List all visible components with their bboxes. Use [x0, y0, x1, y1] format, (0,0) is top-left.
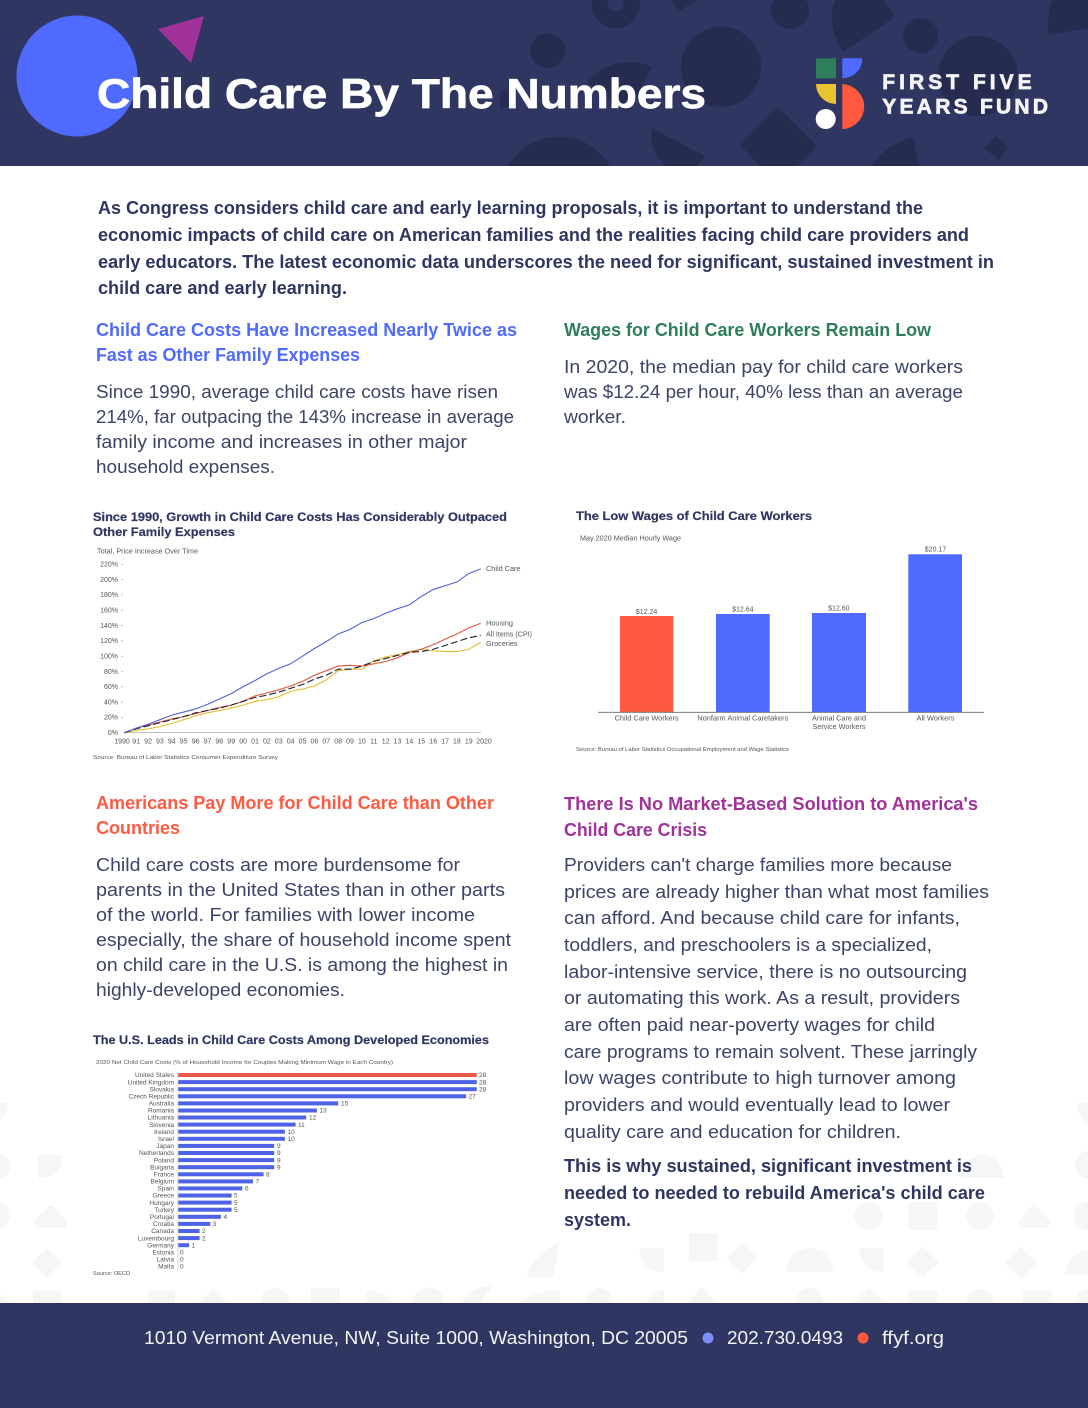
- horizontal bar chart: developed economies: 0: [180, 1250, 184, 1256]
- text: market: care programs to remain solvent. These jarringly: [564, 1041, 978, 1062]
- text: market: are often paid near-poverty wages for child: [564, 1014, 935, 1035]
- line chart: growth in costs: 92: [144, 738, 152, 746]
- heading: market: There Is No Market-Based Solution to America's: [564, 794, 978, 814]
- intro paragraph: child care and early learning.: [98, 278, 347, 298]
- line chart: growth in costs: 200%: [100, 577, 118, 584]
- horizontal bar chart: developed economies: Netherlands: [139, 1150, 175, 1157]
- line chart: growth in costs: 100%: [100, 654, 118, 660]
- text: market: quality care and education for children.: [564, 1121, 901, 1142]
- line chart: growth in costs: 160%: [100, 608, 118, 614]
- heading: international: [96, 793, 494, 838]
- horizontal bar chart: developed economies: Hungary: [149, 1200, 175, 1207]
- line chart: growth in costs: 0%: [108, 730, 118, 737]
- text: costs: 214%, far outpacing the 143% increase in average: [96, 406, 514, 427]
- bar chart: low wages: Service Workers: [812, 724, 866, 731]
- line chart: growth in costs: 94: [168, 738, 176, 746]
- horizontal bar chart: developed economies: 9: [277, 1143, 281, 1150]
- bar chart: low wages: Source: Bureau of Labor Statistics Occupational Employment and Wage Statistics: [576, 747, 789, 753]
- horizontal bar chart: developed economies: United States: [135, 1072, 175, 1079]
- horizontal bar chart: developed economies: 7: [256, 1179, 260, 1186]
- horizontal bar chart: developed economies: 0: [180, 1264, 184, 1271]
- horizontal bar chart: developed economies: Australia: [149, 1101, 174, 1108]
- bar chart: low wages: Animal Care and: [812, 716, 866, 723]
- logo: First Five Years Fund: YEARS FUND: [882, 95, 1048, 118]
- line chart: growth in costs: 95: [180, 738, 188, 746]
- bar chart: low wages: $12.60: [828, 606, 850, 612]
- horizontal bar chart: developed economies: Portugal: [150, 1214, 175, 1221]
- footer red dot: [858, 1332, 868, 1344]
- line chart: growth in costs: 02: [263, 738, 271, 746]
- text: market: Providers can't charge families more because: [564, 854, 952, 875]
- horizontal bar chart: developed economies: Bulgaria: [150, 1164, 174, 1171]
- line chart: growth in costs: Since 1990, Growth in Child Care Costs Has Considerably Outpaced: [93, 510, 507, 524]
- heading: international: Americans Pay More for Child Care than Other: [96, 793, 494, 813]
- line chart: growth in costs: 07: [322, 738, 330, 746]
- decorative blue circle: [16, 16, 138, 136]
- horizontal bar chart: developed economies: 27: [468, 1094, 476, 1100]
- horizontal bar chart: developed economies: Greece: [153, 1193, 174, 1200]
- text: international: especially, the share of household income spent: [96, 929, 511, 950]
- horizontal bar chart: developed economies: Malta: [158, 1264, 174, 1271]
- text: wages: worker.: [563, 406, 626, 427]
- horizontal bar chart: developed economies: 13: [320, 1108, 327, 1115]
- panel: child care costs: [96, 320, 517, 477]
- line chart: growth in costs: 11: [370, 738, 378, 746]
- horizontal bar chart: developed economies: United Kingdom: [128, 1079, 174, 1086]
- panel: international comparison: [96, 793, 511, 1000]
- intro paragraph: [98, 198, 994, 298]
- heading: wages: Wages for Child Care Workers Remain Low: [564, 320, 932, 340]
- horizontal bar chart: developed economies: 11: [298, 1122, 305, 1129]
- horizontal bar chart: developed economies: 9: [277, 1164, 281, 1171]
- line chart: growth in costs: 140%: [100, 623, 118, 630]
- header band: [0, 0, 1088, 166]
- bar chart: low wages: $12.64: [732, 607, 754, 614]
- callout: sustained investment: This is why sustained, significant investment is: [564, 1156, 972, 1176]
- line chart: growth in costs: All Items (CPI): [486, 631, 532, 638]
- logo: First Five Years Fund: [816, 58, 1048, 129]
- line chart: growth in costs: 80%: [104, 669, 118, 676]
- text: international: parents in the United States than in other parts: [96, 879, 505, 900]
- text: wages: [563, 356, 963, 427]
- text: market: can afford. And because child care for infants,: [564, 907, 960, 928]
- decorative purple triangle: [158, 16, 204, 63]
- horizontal bar chart: developed economies: 2: [202, 1235, 206, 1242]
- text: international: highly-developed economies.: [96, 979, 345, 1000]
- heading: costs: [96, 320, 517, 365]
- intro paragraph: economic impacts of child care on American families and the realities facing child care providers and: [98, 225, 969, 245]
- line chart: growth in costs: 19: [465, 738, 473, 746]
- line chart: growth in costs: 01: [251, 738, 259, 746]
- horizontal bar chart: developed economies: 2020 Net Child Care Costs (% of Household Income for Couples Making Minimum Wage in Each Country): [96, 1060, 393, 1066]
- line chart: growth in costs: 18: [453, 738, 461, 746]
- bar chart: low wages: $20.17: [925, 547, 946, 554]
- horizontal bar chart: developed economies: Germany: [147, 1242, 175, 1249]
- text: market: providers and would eventually lead to lower: [564, 1094, 950, 1115]
- text: international: [96, 854, 511, 1000]
- logo: First Five Years Fund: FIRST FIVE: [882, 71, 1032, 94]
- line chart: growth in costs: Housing: [486, 620, 513, 628]
- line chart: growth in costs: 10: [358, 738, 366, 746]
- text: wages: was $12.24 per hour, 40% less than an average: [563, 381, 963, 402]
- bar chart: low wages: [576, 509, 984, 753]
- line chart: growth in costs: 2020: [476, 738, 492, 746]
- text: market: labor-intensive service, there is no outsourcing: [564, 961, 967, 982]
- text: market: prices are already higher than what most families: [564, 881, 989, 902]
- line chart: growth in costs: [93, 510, 532, 761]
- horizontal bar chart: developed economies: Source: OECD: [93, 1271, 130, 1277]
- line chart: growth in costs: Child Care: [486, 566, 521, 573]
- bar chart: low wages: The Low Wages of Child Care Workers: [576, 509, 812, 523]
- horizontal bar chart: developed economies: Latvia: [157, 1256, 174, 1264]
- text: market: low wages contribute to high turnover among: [564, 1067, 956, 1088]
- line chart: growth in costs: Total, Price Increase Over Time: [97, 548, 198, 556]
- horizontal bar chart: developed economies: 28: [479, 1079, 487, 1086]
- footer blue dot: [702, 1332, 714, 1344]
- horizontal bar chart: developed economies: Turkey: [154, 1207, 175, 1214]
- horizontal bar chart: developed economies: Canada: [151, 1228, 174, 1235]
- heading: costs: Child Care Costs Have Increased Nearly Twice as: [96, 320, 517, 340]
- line chart: growth in costs: 120%: [100, 638, 118, 645]
- horizontal bar chart: developed economies: 4: [224, 1214, 228, 1221]
- horizontal bar chart: developed economies: France: [154, 1172, 174, 1178]
- horizontal bar chart: developed economies: 2: [202, 1228, 206, 1235]
- text: costs: family income and increases in other major: [96, 431, 467, 452]
- line chart: growth in costs: 93: [156, 738, 164, 746]
- title: Child Care By The Numbers: [97, 70, 706, 117]
- text: market: toddlers, and preschoolers is a specialized,: [564, 934, 932, 955]
- line chart: growth in costs: 98: [215, 738, 223, 746]
- horizontal bar chart: developed economies: Luxembourg: [138, 1235, 174, 1242]
- horizontal bar chart: developed economies: 12: [309, 1115, 317, 1122]
- text: costs: [96, 381, 514, 477]
- line chart: growth in costs: 96: [192, 738, 200, 746]
- horizontal bar chart: developed economies: 10: [288, 1129, 295, 1136]
- horizontal bar chart: developed economies: 9: [277, 1150, 281, 1157]
- intro paragraph: As Congress considers child care and early learning proposals, it is important to understand the: [98, 198, 923, 218]
- line chart: growth in costs: 99: [227, 738, 235, 746]
- horizontal bar chart: developed economies: Ireland: [154, 1129, 174, 1136]
- line chart: growth in costs: 15: [417, 738, 425, 746]
- line chart: growth in costs: 20%: [104, 715, 118, 722]
- text: market: or automating this work. As a result, providers: [564, 987, 960, 1008]
- line chart: growth in costs: 180%: [100, 592, 118, 599]
- heading: international: Countries: [96, 818, 180, 838]
- horizontal bar chart: developed economies: 8: [266, 1172, 270, 1178]
- heading: costs: Fast as Other Family Expenses: [96, 345, 360, 365]
- horizontal bar chart: developed economies: Poland: [154, 1157, 174, 1164]
- line chart: growth in costs: 1990: [114, 738, 130, 746]
- horizontal bar chart: developed economies: Slovakia: [149, 1086, 174, 1093]
- horizontal bar chart: developed economies: 1: [192, 1242, 196, 1249]
- panel: wages: [563, 320, 963, 427]
- horizontal bar chart: developed economies: 10: [288, 1136, 295, 1143]
- bar chart: low wages: $12.24: [636, 609, 657, 616]
- text: international: Child care costs are more burdensome for: [96, 854, 460, 875]
- horizontal bar chart: developed economies: 5: [234, 1193, 238, 1200]
- line chart: growth in costs: 13: [394, 738, 401, 746]
- horizontal bar chart: developed economies: 3: [212, 1221, 216, 1228]
- line chart: growth in costs: 08: [334, 738, 342, 746]
- line chart: growth in costs: 91: [132, 738, 140, 746]
- horizontal bar chart: developed economies: Spain: [157, 1186, 174, 1193]
- horizontal bar chart: developed economies: 15: [341, 1101, 349, 1108]
- horizontal bar chart: developed economies: 5: [234, 1207, 238, 1214]
- line chart: growth in costs: 09: [346, 738, 354, 746]
- line chart: growth in costs: 04: [287, 738, 295, 746]
- bar chart: low wages: May 2020 Median Hourly Wage: [580, 535, 681, 542]
- horizontal bar chart: developed economies: Israel: [158, 1136, 175, 1143]
- line chart: growth in costs: 97: [204, 738, 211, 746]
- horizontal bar chart: developed economies: 28: [479, 1086, 487, 1093]
- heading: market: [564, 794, 978, 840]
- heading: market: Child Care Crisis: [564, 820, 707, 840]
- line chart: growth in costs: 60%: [104, 684, 118, 691]
- horizontal bar chart: developed economies: Slovenia: [149, 1122, 174, 1129]
- callout: sustained investment: [564, 1156, 985, 1230]
- horizontal bar chart: developed economies: 9: [277, 1157, 281, 1164]
- horizontal bar chart: developed economies: 5: [234, 1200, 238, 1207]
- line chart: growth in costs: Groceries: [486, 641, 518, 648]
- bar chart: low wages: All Workers: [916, 716, 955, 723]
- line chart: growth in costs: 17: [441, 738, 449, 746]
- horizontal bar chart: developed economies: 0: [180, 1256, 184, 1264]
- footer phone: 202.730.0493: [727, 1328, 843, 1348]
- horizontal bar chart: developed economies: 28: [479, 1072, 487, 1079]
- callout: sustained investment: needed to needed to rebuild America's child care: [564, 1183, 985, 1203]
- line chart: growth in costs: 220%: [100, 562, 118, 569]
- horizontal bar chart: developed economies: 6: [245, 1186, 249, 1193]
- text: international: of the world. For families with lower income: [96, 904, 475, 925]
- horizontal bar chart: developed economies: Belgium: [151, 1179, 174, 1186]
- horizontal bar chart: developed economies: Romania: [148, 1108, 174, 1115]
- text: costs: Since 1990, average child care costs have risen: [96, 381, 498, 402]
- line chart: growth in costs: 00: [239, 738, 247, 746]
- horizontal bar chart: developed economies: The U.S. Leads in Child Care Costs Among Developed Economies: [93, 1033, 489, 1047]
- text: costs: household expenses.: [96, 456, 275, 477]
- line chart: growth in costs: 40%: [104, 699, 118, 706]
- callout: sustained investment: system.: [564, 1210, 631, 1230]
- text: international: on child care in the U.S. is among the highest in: [96, 954, 508, 975]
- horizontal bar chart: developed economies: Croatia: [153, 1221, 174, 1228]
- panel: market-based solution: [564, 794, 989, 1230]
- line chart: growth in costs: Source: Bureau of Labor Statistics Consumer Expenditure Survey: [93, 755, 278, 761]
- footer band: [0, 1303, 1088, 1408]
- line chart: growth in costs: 12: [382, 738, 390, 746]
- line chart: growth in costs: 14: [406, 738, 413, 746]
- horizontal bar chart: developed economies: Japan: [156, 1143, 174, 1150]
- line chart: growth in costs: Other Family Expenses: [93, 525, 235, 539]
- bar chart: low wages: Child Care Workers: [615, 716, 679, 723]
- horizontal bar chart: developed economies: [93, 1033, 489, 1277]
- background pattern: [0, 1103, 1088, 1303]
- bar chart: low wages: Nonfarm Animal Caretakers: [697, 716, 789, 723]
- horizontal bar chart: developed economies: Estonia: [152, 1250, 174, 1256]
- line chart: growth in costs: 05: [299, 738, 306, 746]
- horizontal bar chart: developed economies: Czech Republic: [128, 1094, 175, 1100]
- line chart: growth in costs: 16: [429, 738, 437, 746]
- intro paragraph: early educators. The latest economic data underscores the need for significant, sustained investment in: [98, 252, 994, 272]
- line chart: growth in costs: 03: [275, 738, 283, 746]
- text: wages: In 2020, the median pay for child care workers: [564, 356, 963, 377]
- horizontal bar chart: developed economies: Lithuania: [148, 1115, 174, 1122]
- text: market: [564, 854, 989, 1142]
- line chart: growth in costs: 06: [311, 738, 318, 746]
- footer website: ffyf.org: [882, 1328, 944, 1348]
- footer address: 1010 Vermont Avenue, NW, Suite 1000, Washington, DC 20005: [144, 1328, 688, 1348]
